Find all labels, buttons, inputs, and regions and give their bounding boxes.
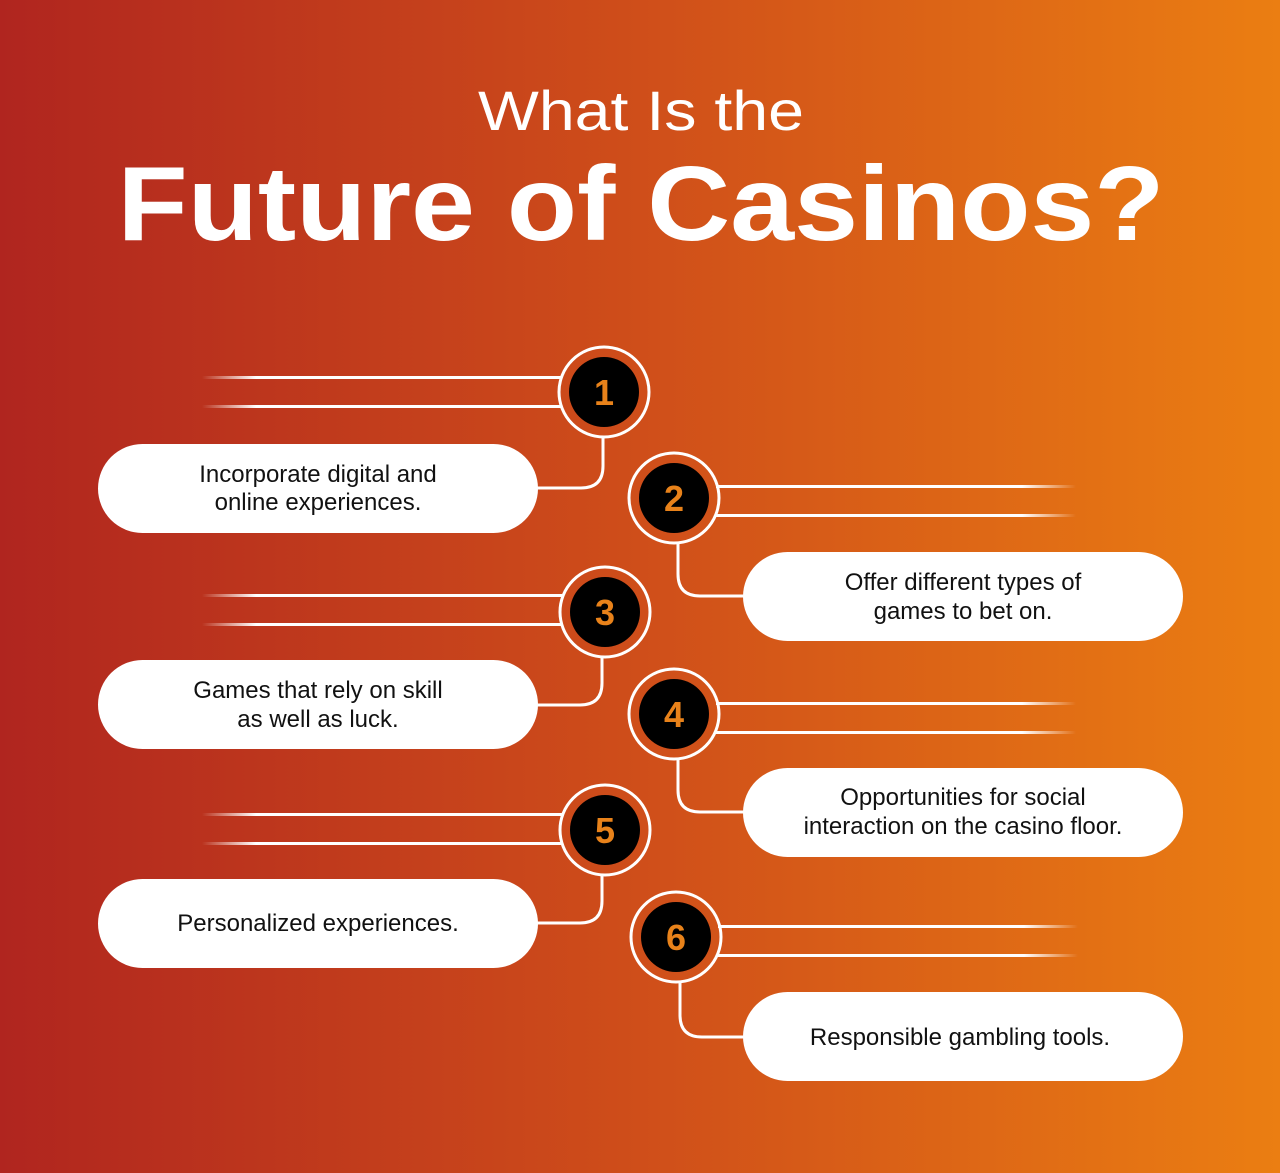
item 4: interaction on the casino floor. <box>804 813 1122 840</box>
item 2: games to bet on. <box>874 598 1052 625</box>
item 5 <box>98 785 650 968</box>
item 2: 2 <box>664 478 684 519</box>
item 1: online experiences. <box>215 489 421 516</box>
item 4: Opportunities for social <box>840 784 1086 811</box>
item 2: Offer different types of <box>845 569 1082 596</box>
title <box>118 79 1164 263</box>
item 6: Responsible gambling tools. <box>810 1024 1110 1051</box>
item 1: 1 <box>594 372 614 413</box>
item 3 <box>98 567 650 749</box>
title: Future of Casinos? <box>118 145 1164 263</box>
item 3: as well as luck. <box>237 706 399 733</box>
item 5: 5 <box>595 810 615 851</box>
item 1: Incorporate digital and <box>199 461 437 488</box>
item 6: 6 <box>666 917 686 958</box>
item 3: 3 <box>595 592 615 633</box>
item 4 <box>629 669 1183 857</box>
item 4: 4 <box>664 694 684 735</box>
item 2 <box>629 453 1183 641</box>
item 5: Personalized experiences. <box>177 910 459 937</box>
item 3: Games that rely on skill <box>193 677 443 704</box>
item 1 <box>98 347 649 533</box>
title: What Is the <box>478 79 804 142</box>
item 6 <box>631 892 1183 1081</box>
